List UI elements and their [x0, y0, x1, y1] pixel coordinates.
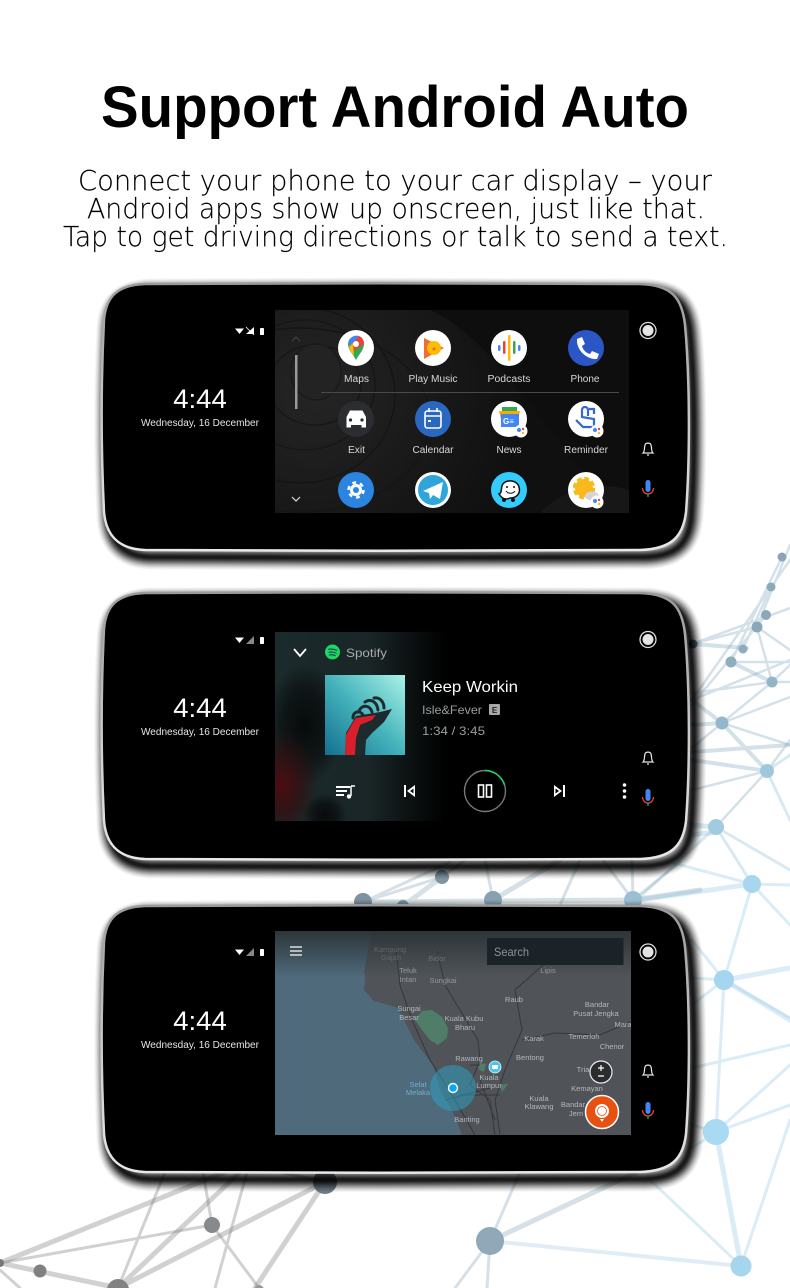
- map labels: Lipis: [540, 966, 556, 975]
- icon: reminder: [568, 401, 604, 437]
- divider: [321, 392, 619, 393]
- report button: [586, 1096, 618, 1128]
- app labels: Exit: [348, 445, 365, 456]
- device shadow: [107, 290, 694, 558]
- icon: weather: [568, 472, 604, 508]
- title: Support Android Auto: [101, 75, 689, 140]
- playback controls: [336, 770, 626, 812]
- map: [275, 931, 632, 1135]
- icon: phone: [568, 330, 604, 366]
- map labels: Gajah: [381, 953, 401, 962]
- app labels: Reminder: [564, 445, 609, 456]
- icon: podcasts: [491, 330, 527, 366]
- app labels: Maps: [344, 374, 369, 385]
- device shadow: [107, 912, 694, 1180]
- device body: [102, 283, 689, 551]
- map labels: Kuala: [529, 1094, 549, 1103]
- map labels: Kuala Kubu: [445, 1014, 483, 1023]
- album art: [325, 675, 405, 755]
- panel: phone 3 map navigation: [102, 905, 694, 1180]
- spotify header: [294, 644, 387, 660]
- clock: Wednesday, 16 December: [141, 727, 260, 738]
- icon: news: [491, 401, 527, 437]
- network nodes: [0, 552, 786, 1288]
- map labels: Bharu: [455, 1023, 475, 1032]
- map marker: [489, 1061, 501, 1073]
- player background: [275, 632, 429, 821]
- park areas: [415, 1010, 448, 1045]
- screen wallpaper: [275, 310, 629, 513]
- track info: Isle&Fever: [422, 703, 482, 717]
- app labels: [344, 374, 609, 456]
- scroll controls: [292, 337, 300, 501]
- map labels: Sungkai: [429, 976, 457, 985]
- clock: 4:44: [173, 384, 227, 414]
- clock: [141, 384, 260, 429]
- description text: Tap to get driving directions or talk to send a text.: [63, 220, 728, 253]
- clock: Wednesday, 16 December: [141, 418, 260, 429]
- spotify header: Spotify: [346, 646, 387, 660]
- clock: [141, 693, 260, 738]
- icon: news: G≡: [503, 417, 514, 426]
- icon: telegram: [415, 472, 451, 508]
- map labels: Banting: [454, 1115, 480, 1124]
- map labels: Bidor: [428, 954, 446, 963]
- map labels: Sungai: [397, 1004, 421, 1013]
- roads: [396, 950, 630, 1135]
- device body: [102, 905, 689, 1173]
- device shadow: [107, 599, 694, 867]
- rail icons: home, bell, mic: [640, 632, 656, 806]
- map labels: Bandar: [561, 1100, 586, 1109]
- description text: Connect your phone to your car display – your: [78, 164, 712, 197]
- map labels: Mara: [614, 1020, 632, 1029]
- clock: [141, 1006, 260, 1051]
- zoom control: [590, 1061, 612, 1083]
- search box: Search: [494, 945, 529, 959]
- map labels: Bentong: [516, 1053, 544, 1062]
- map labels: Lumpur: [476, 1081, 502, 1090]
- map labels: Temerloh: [569, 1032, 599, 1041]
- map labels: Raub: [505, 995, 523, 1004]
- icon: calendar: [415, 401, 451, 437]
- status bar icons: [235, 327, 264, 335]
- icon: settings: [338, 472, 374, 508]
- map labels: Kuala: [479, 1073, 499, 1082]
- status bar icons: [235, 636, 264, 644]
- assistant badges: [514, 424, 604, 508]
- map labels: Chenor: [600, 1042, 625, 1051]
- icon: maps: [338, 330, 374, 366]
- map labels: Karak: [524, 1034, 544, 1043]
- map labels: Selat: [409, 1080, 427, 1089]
- icon: exit: [338, 401, 374, 437]
- map labels: Intan: [400, 975, 416, 984]
- app labels: Calendar: [412, 445, 454, 456]
- status bar icons: [235, 948, 264, 956]
- track info: [422, 679, 518, 738]
- track info: E: [492, 706, 498, 715]
- map labels: Melaka: [406, 1088, 431, 1097]
- app labels: Podcasts: [488, 374, 530, 385]
- app labels: News: [496, 445, 522, 456]
- map labels: Kampung: [374, 945, 406, 954]
- current location: [430, 1065, 476, 1111]
- map labels: Jem: [569, 1109, 583, 1118]
- map labels: Kemayan: [571, 1084, 603, 1093]
- panel: phone 1 app launcher: [102, 283, 694, 558]
- rail icons: home, bell, mic: [640, 322, 656, 497]
- background network: grey-blue and light-blue mesh: [0, 545, 790, 1288]
- map labels: [374, 945, 632, 1124]
- clock: Wednesday, 16 December: [141, 1040, 260, 1051]
- track info: 1:34 / 3:45: [422, 724, 485, 738]
- map labels: Klawang: [525, 1102, 553, 1111]
- app labels: Play Music: [408, 374, 458, 385]
- map labels: Pusat Jengka: [573, 1009, 620, 1018]
- icon: play music: [415, 330, 451, 366]
- menu icon: [290, 947, 302, 955]
- map labels: Teluk: [399, 966, 417, 975]
- description text: Android apps show up onscreen, just like that.: [87, 192, 705, 225]
- rail icons: home, bell, mic: [640, 944, 656, 1119]
- clock: 4:44: [173, 693, 227, 723]
- map labels: Rawang: [455, 1054, 483, 1063]
- icon: waze: [491, 472, 527, 508]
- device body: [102, 592, 689, 860]
- map labels: Tria: [577, 1065, 590, 1074]
- clock: 4:44: [173, 1006, 227, 1036]
- app labels: Phone: [570, 374, 600, 385]
- search box: [487, 938, 624, 965]
- panel: phone 2 Spotify player: [102, 592, 694, 867]
- map labels: Bandar: [585, 1000, 610, 1009]
- track info: Keep Workin: [422, 679, 518, 696]
- description text: [63, 164, 728, 253]
- map labels: Besar: [399, 1013, 419, 1022]
